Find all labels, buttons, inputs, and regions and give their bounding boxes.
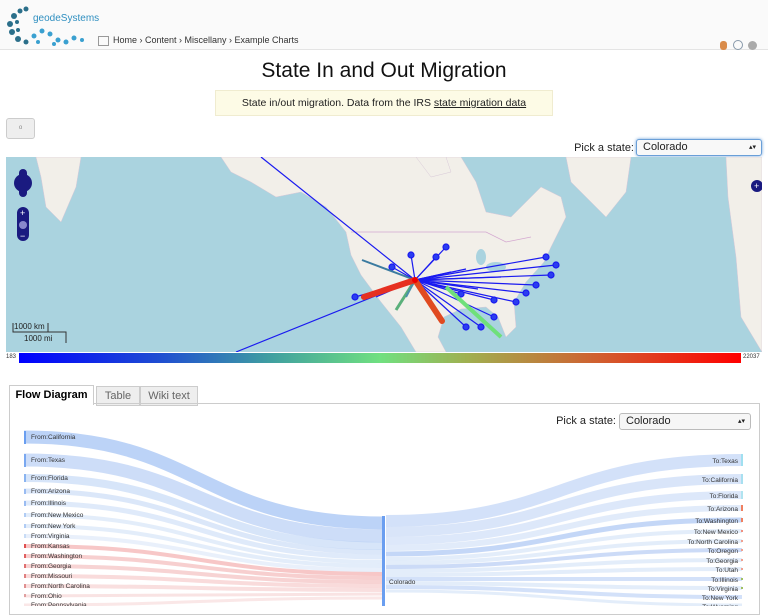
state picker bottom: ▴▾ [738, 418, 745, 425]
tabs [9, 385, 198, 406]
right nodes [741, 454, 743, 589]
scale: 1000 mi [24, 334, 53, 343]
map [6, 157, 762, 352]
sankey diagram: From:Texas [31, 457, 66, 464]
sankey diagram: To:Arizona [707, 506, 738, 513]
sankey diagram: From:New Mexico [31, 512, 84, 519]
state picker bottom [556, 413, 751, 430]
flow lines [236, 157, 559, 352]
scale [13, 322, 66, 343]
color legend bar: 22037 [743, 354, 760, 360]
title: State In and Out Migration [261, 59, 507, 82]
center node [382, 516, 385, 606]
map: + [20, 208, 25, 218]
sankey diagram: From:Illinois [31, 500, 67, 507]
sankey diagram: From:Georgia [31, 563, 71, 570]
button: o [19, 125, 22, 131]
map: + [754, 181, 759, 191]
button [6, 118, 35, 139]
sankey diagram: To:Washington [695, 518, 738, 525]
sankey diagram: To:Oregon [708, 548, 738, 555]
color legend bar: 183 [6, 354, 16, 360]
sankey diagram: To:New Mexico [694, 529, 738, 536]
sankey diagram: From:Arizona [31, 488, 70, 495]
sankey diagram: To:Texas [712, 458, 739, 465]
sankey diagram: From:New York [31, 523, 76, 530]
sankey diagram: From:Florida [31, 475, 68, 482]
sankey diagram: To:Georgia [706, 558, 738, 565]
sankey diagram: To:Utah [716, 567, 738, 574]
sankey diagram: Colorado [389, 579, 416, 586]
sankey diagram: From:Washington [31, 553, 82, 560]
logo [7, 6, 99, 46]
tabs: Table [105, 390, 131, 402]
logo: geodeSystems [33, 13, 99, 24]
sankey diagram: From:Ohio [31, 593, 62, 600]
sankey diagram: From:Missouri [31, 573, 72, 580]
sankey diagram: To:Illinois [711, 577, 739, 584]
tabs: Flow Diagram [15, 389, 88, 401]
sankey diagram: From:Kansas [31, 543, 70, 550]
state picker bottom: Colorado [626, 415, 671, 427]
left nodes [24, 431, 26, 597]
color legend bar [0, 352, 768, 364]
header bar [0, 0, 768, 50]
sankey diagram: From:California [31, 434, 76, 441]
state picker top: ▴▾ [749, 144, 756, 151]
sankey diagram [24, 430, 743, 606]
sankey diagram: To:Virginia [708, 586, 738, 593]
state picker bottom: Pick a state: [556, 415, 616, 427]
land masses [36, 157, 762, 352]
breadcrumb: Home › Content › Miscellany › Example Charts [113, 35, 299, 45]
sankey diagram: To:North Carolina [687, 539, 738, 546]
map controls [14, 169, 763, 241]
state picker top [574, 136, 764, 157]
header icons [720, 40, 757, 50]
sankey diagram: From:Virginia [31, 533, 70, 540]
sankey diagram: To:California [702, 477, 738, 484]
state picker top: Colorado [643, 141, 688, 153]
map: − [20, 231, 25, 241]
flow panel [9, 403, 760, 615]
sankey diagram: To:New York [702, 595, 739, 602]
sankey diagram: From:North Carolina [31, 583, 90, 590]
info box: State in/out migration. Data from the IRS state migration data [242, 97, 526, 109]
scale: 1000 km [14, 322, 45, 331]
sankey diagram: To:Florida [709, 493, 738, 500]
info box [215, 90, 553, 116]
tabs: Wiki text [148, 390, 190, 402]
state picker top: Pick a state: [574, 142, 634, 154]
